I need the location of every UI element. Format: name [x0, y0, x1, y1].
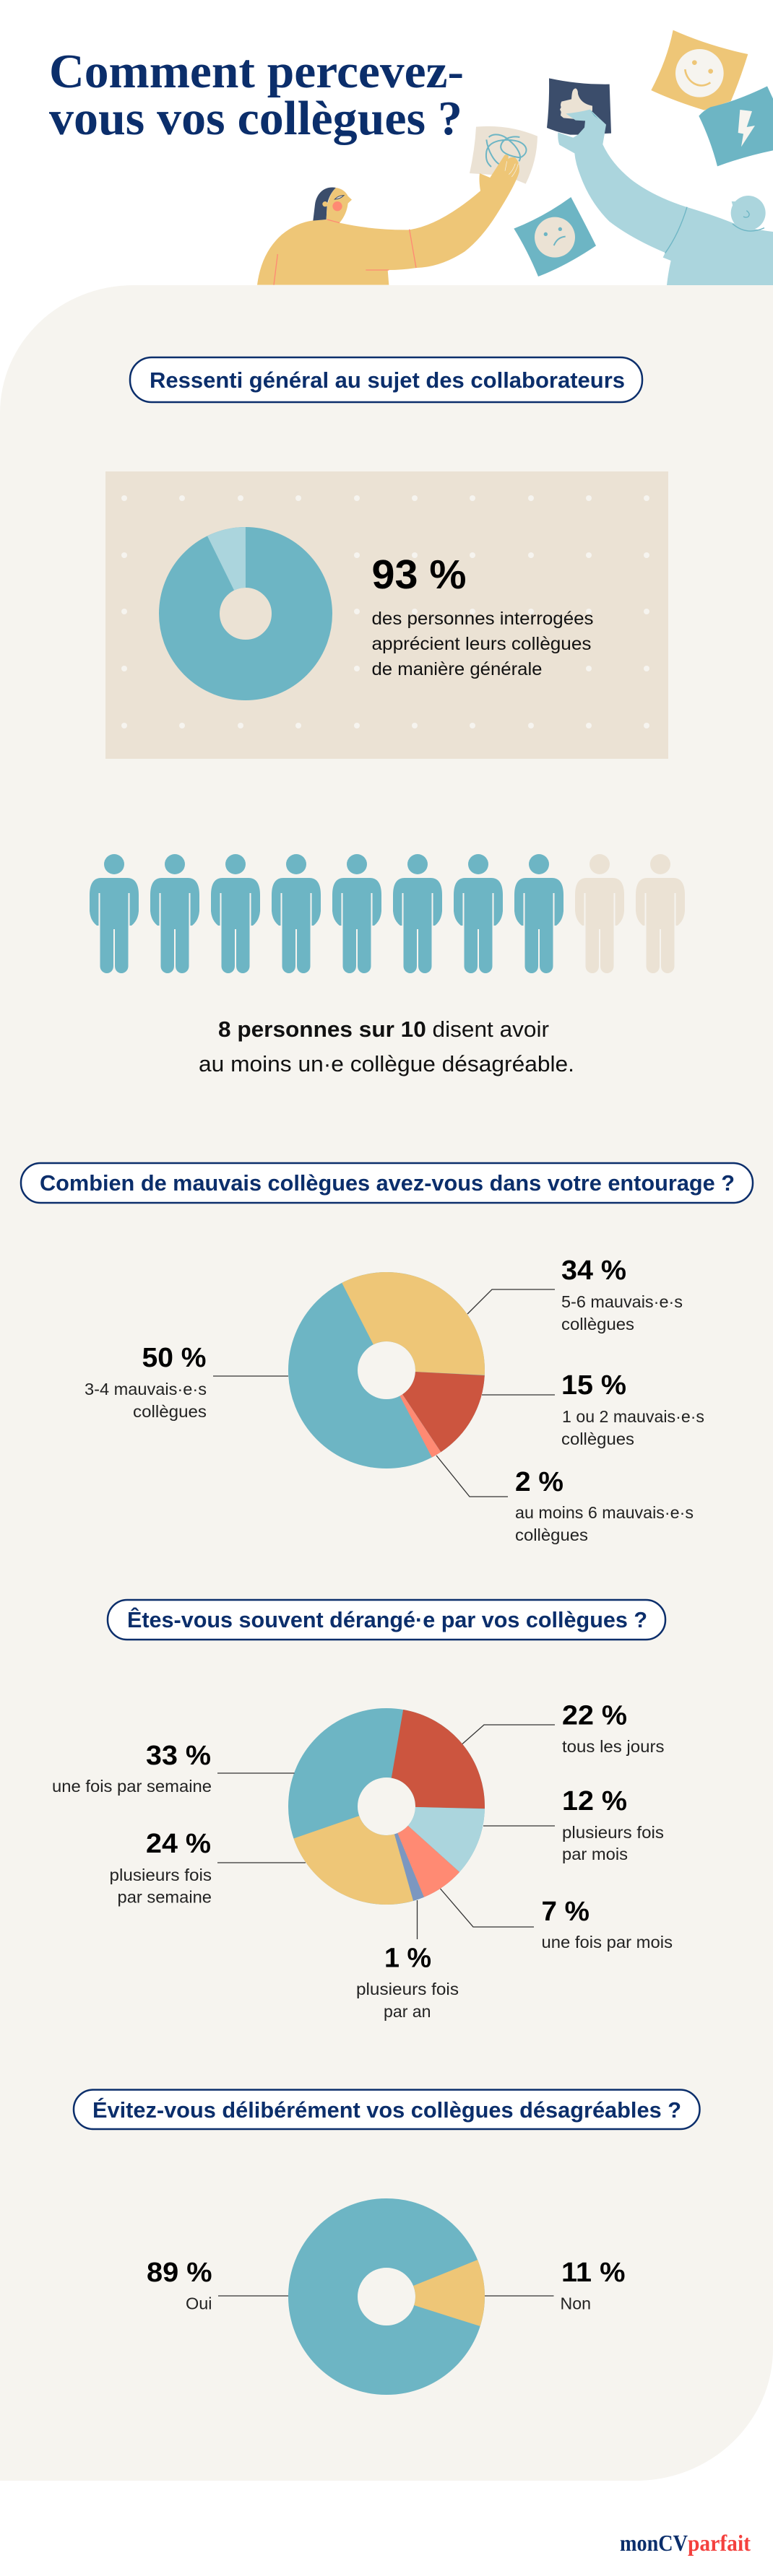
callout: 12 %: plusieurs fois — [562, 1823, 664, 1842]
callout: 11 %: Non — [561, 2294, 591, 2313]
callout: 22 %: 22 % — [562, 1701, 627, 1731]
callout: 50 %: collègues — [133, 1402, 207, 1421]
callout: 33 %: une fois par semaine — [52, 1777, 212, 1796]
callout: 34 %: collègues — [561, 1315, 634, 1333]
callout: 24 %: par semaine — [117, 1887, 212, 1906]
callout: 33 % — [52, 1741, 295, 1796]
callout: 34 %: 5-6 mauvais·e·s — [561, 1292, 683, 1311]
icon: thumbs-up card — [547, 78, 611, 135]
logo: monCV — [620, 2530, 688, 2556]
callout: 15 %: 15 % — [561, 1370, 626, 1401]
logo — [620, 2530, 751, 2556]
title: vous vos collègues ? — [49, 92, 462, 145]
callout: 12 %: par mois — [562, 1845, 628, 1863]
callout: 7 %: 7 % — [542, 1897, 590, 1927]
donut chart: fréquence — [297, 1717, 476, 1896]
callout: 34 %: 34 % — [561, 1256, 626, 1286]
callout: 1 %: par an — [384, 2002, 431, 2021]
callout: 2 %: collègues — [515, 1526, 588, 1544]
stat: 93 %: apprécient leurs collègues — [371, 634, 591, 654]
callout: 11 % — [485, 2258, 626, 2313]
callout: 33 %: 33 % — [146, 1741, 211, 1771]
text: 8 personnes sur 10: au moins un·e collègue désagréable. — [199, 1051, 574, 1076]
callout: 89 %: Oui — [186, 2294, 212, 2313]
stat: 93 %: des personnes interrogées — [371, 609, 594, 629]
callout: 15 % — [482, 1370, 704, 1448]
callout: 34 % — [467, 1256, 683, 1333]
callout: 7 % — [441, 1889, 673, 1951]
heading: ressenti général — [130, 357, 642, 402]
heading: ressenti général: Ressenti général au sujet des collaborateurs — [150, 367, 625, 393]
callout: 22 %: tous les jours — [562, 1737, 665, 1756]
person: light blue colleague — [558, 110, 773, 285]
stat: 93 % — [371, 552, 594, 679]
callout: 50 % — [85, 1343, 288, 1421]
callout: 2 % — [436, 1455, 694, 1544]
icon: sad face card — [514, 197, 596, 277]
heading: êtes-vous souvent dérangé·e: Êtes-vous souvent dérangé·e par vos collègues ? — [127, 1606, 647, 1632]
callout: 1 % — [356, 1900, 459, 2021]
callout: 2 %: 2 % — [515, 1467, 563, 1497]
text: 8 personnes sur 10 — [199, 1017, 574, 1076]
callout: 12 %: 12 % — [562, 1786, 627, 1816]
heading: évitez-vous: Évitez-vous délibérément vos collègues désagréables ? — [92, 2097, 681, 2123]
panel: 93 % — [105, 471, 668, 759]
stat: 93 %: de manière générale — [371, 659, 542, 679]
icon: smiley card — [651, 30, 748, 110]
callout: 22 % — [462, 1701, 665, 1756]
callout: 89 %: 89 % — [147, 2258, 212, 2288]
callout: 7 %: une fois par mois — [542, 1933, 673, 1951]
title: Comment percevez- — [49, 45, 464, 98]
callout: 24 % — [110, 1829, 306, 1906]
callout: 50 %: 50 % — [142, 1343, 207, 1373]
callout: 89 % — [147, 2258, 288, 2313]
pictogram: 8 people out of 10 — [90, 854, 685, 973]
callout: 1 %: plusieurs fois — [356, 1980, 459, 1998]
callout: 15 %: 1 ou 2 mauvais·e·s — [562, 1407, 704, 1426]
icon: scribble paper — [470, 126, 537, 184]
callout: 1 %: 1 % — [384, 1944, 431, 1974]
heading: combien de mauvais collègues: Combien de mauvais collègues avez-vous dans votre entourage ? — [40, 1170, 735, 1196]
callout: 15 %: collègues — [561, 1430, 634, 1448]
title — [49, 45, 464, 145]
heading: évitez-vous — [74, 2089, 699, 2129]
person: yellow woman — [257, 155, 519, 285]
callout: 12 % — [483, 1786, 664, 1863]
heading: combien de mauvais collègues — [21, 1163, 753, 1203]
donut chart: mauvais collègues — [298, 1282, 475, 1458]
logo: parfait — [688, 2530, 751, 2556]
icon: lightning card — [699, 86, 773, 166]
donut chart: 93 % — [170, 539, 321, 689]
illustration: two people holding up cards — [257, 30, 773, 285]
donut chart: évitement — [303, 2214, 470, 2380]
text: 8 personnes sur 10: 8 personnes sur 10 disent avoir — [218, 1017, 549, 1042]
callout: 11 %: 11 % — [561, 2258, 626, 2288]
stat: 93 %: 93 % — [371, 552, 467, 598]
callout: 24 %: plusieurs fois — [110, 1866, 212, 1884]
heading: êtes-vous souvent dérangé·e — [108, 1600, 665, 1640]
callout: 50 %: 3-4 mauvais·e·s — [85, 1380, 207, 1398]
callout: 2 %: au moins 6 mauvais·e·s — [515, 1503, 694, 1522]
callout: 24 %: 24 % — [146, 1829, 211, 1859]
